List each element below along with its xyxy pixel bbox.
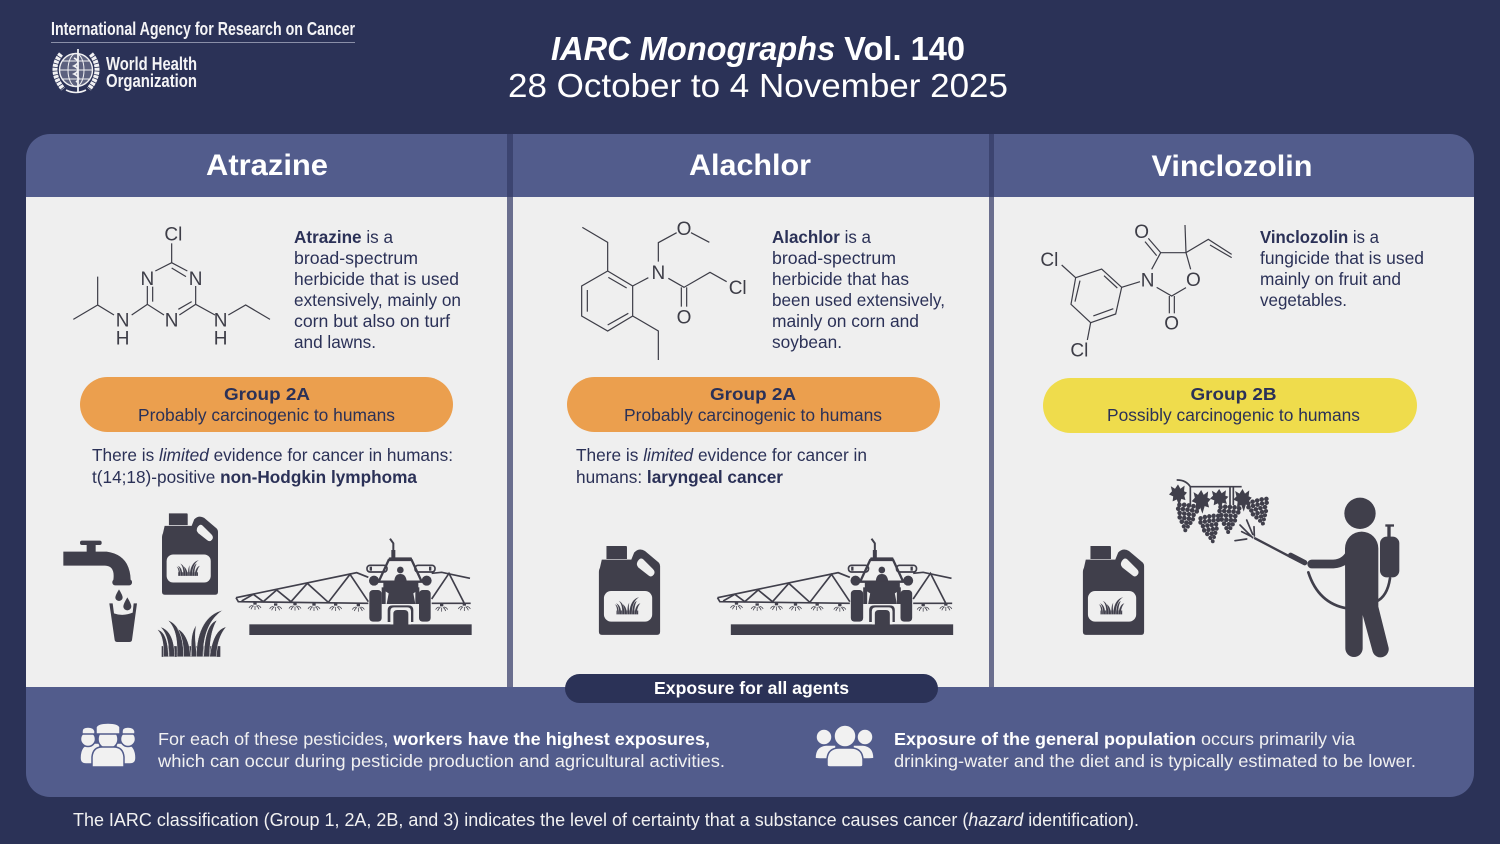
heading: Alachlor xyxy=(689,149,811,182)
description: soybean. xyxy=(772,332,842,352)
panel: Vinclozolin xyxy=(994,150,1474,687)
icon: tractor sprayer xyxy=(718,539,953,635)
description: mainly on fruit and xyxy=(1260,269,1401,289)
description: mainly on corn and xyxy=(772,311,919,331)
evidence: humans: laryngeal cancer xyxy=(576,467,783,487)
structure: atrazine: N xyxy=(189,269,203,290)
title xyxy=(508,30,1008,104)
structure: atrazine: H xyxy=(116,328,130,349)
structure: alachlor xyxy=(582,219,747,360)
description: broad-spectrum xyxy=(772,248,896,268)
description: herbicide that is used xyxy=(294,269,459,289)
structure: vinclozolin: O xyxy=(1134,222,1149,243)
structure: vinclozolin: Cl xyxy=(1070,341,1088,362)
description: vegetables. xyxy=(1260,290,1347,310)
icon: person spraying xyxy=(1235,498,1399,657)
structure: atrazine xyxy=(73,225,270,349)
panel: Alachlor xyxy=(513,149,989,687)
evidence xyxy=(92,445,453,487)
badge: Group 2B: Possibly carcinogenic to humans xyxy=(1107,405,1360,425)
footnote: The IARC classification (Group 1, 2A, 2B, and 3) indicates the level of certainty that a substance causes cancer (hazard identification). xyxy=(73,810,1139,830)
description: extensively, mainly on xyxy=(294,290,461,310)
evidence: There is limited evidence for cancer in xyxy=(576,445,867,465)
icon: jug xyxy=(1083,546,1144,635)
main frame xyxy=(26,134,1474,797)
structure: atrazine: N xyxy=(116,311,130,332)
icon: population xyxy=(815,725,874,767)
structure: vinclozolin: O xyxy=(1186,270,1201,291)
evidence: t(14;18)-positive non-Hodgkin lymphoma xyxy=(92,467,417,487)
structure: vinclozolin: N xyxy=(1141,271,1155,292)
badge: Group 2A: Group 2A xyxy=(224,384,310,404)
description: fungicide that is used xyxy=(1260,248,1424,268)
panel: Atrazine xyxy=(26,149,507,687)
description: herbicide that has xyxy=(772,269,909,289)
icon: jug xyxy=(599,546,660,635)
badge: Group 2A xyxy=(567,377,940,432)
structure: atrazine: N xyxy=(165,311,179,332)
structure: vinclozolin xyxy=(1040,222,1232,362)
description: broad-spectrum xyxy=(294,248,418,268)
title: 28 October to 4 November 2025 xyxy=(508,67,1008,104)
exposure band xyxy=(26,674,1474,771)
population text: drinking-water and the diet and is typically estimated to be lower. xyxy=(894,751,1416,771)
population text: Exposure of the general population occurs primarily via xyxy=(894,729,1355,749)
description xyxy=(1260,227,1424,310)
structure: vinclozolin: O xyxy=(1164,313,1179,334)
population text xyxy=(894,729,1416,771)
structure: atrazine: H xyxy=(214,328,228,349)
icon: workers xyxy=(80,723,136,767)
description xyxy=(772,227,945,352)
structure: alachlor: Cl xyxy=(729,278,747,299)
badge: Group 2A: Probably carcinogenic to humans xyxy=(624,405,882,425)
description: Atrazine is a xyxy=(294,227,393,247)
icon: jug xyxy=(162,513,218,595)
label: Exposure for all agents xyxy=(565,674,938,703)
heading: Vinclozolin xyxy=(1152,150,1312,183)
description: Alachlor is a xyxy=(772,227,871,247)
icon: tap and glass xyxy=(63,541,137,642)
icon: tractor sprayer xyxy=(236,539,472,635)
description: corn but also on turf xyxy=(294,311,450,331)
icon: grapes and vine xyxy=(1169,480,1275,545)
logo: IARC and WHO xyxy=(51,19,355,92)
structure: vinclozolin: Cl xyxy=(1040,250,1058,271)
structure: alachlor: O xyxy=(677,307,691,328)
description xyxy=(294,227,461,352)
heading: Atrazine xyxy=(206,149,328,182)
structure: atrazine: N xyxy=(214,311,228,332)
badge: Group 2A: Probably carcinogenic to humans xyxy=(138,405,395,425)
icon: WHO emblem xyxy=(55,49,97,92)
description: Vinclozolin is a xyxy=(1260,227,1379,247)
evidence xyxy=(576,445,867,487)
workers text xyxy=(157,729,725,771)
structure: alachlor: O xyxy=(677,219,691,240)
description: and lawns. xyxy=(294,332,376,352)
evidence: There is limited evidence for cancer in humans: xyxy=(92,445,453,465)
description: been used extensively, xyxy=(772,290,945,310)
title: IARC Monographs Vol. 140 xyxy=(551,30,965,67)
WHO name: World Health xyxy=(106,54,197,74)
badge: Group 2B: Group 2B xyxy=(1190,384,1276,404)
badge: Group 2A: Group 2A xyxy=(710,384,796,404)
structure: atrazine: Cl xyxy=(164,225,182,246)
workers text: For each of these pesticides, workers have the highest exposures, xyxy=(158,729,710,749)
workers text: which can occur during pesticide production and agricultural activities. xyxy=(157,751,725,771)
agency name: International Agency for Research on Cancer xyxy=(51,19,355,39)
badge: Group 2A xyxy=(80,377,453,432)
label: Exposure for all agents: Exposure for all agents xyxy=(654,678,849,698)
structure: alachlor: N xyxy=(651,263,665,284)
structure: atrazine: N xyxy=(140,269,154,290)
logo: IARC and WHO: Organization xyxy=(106,71,197,91)
badge: Group 2B xyxy=(1043,378,1417,433)
icon: grass xyxy=(157,610,226,657)
